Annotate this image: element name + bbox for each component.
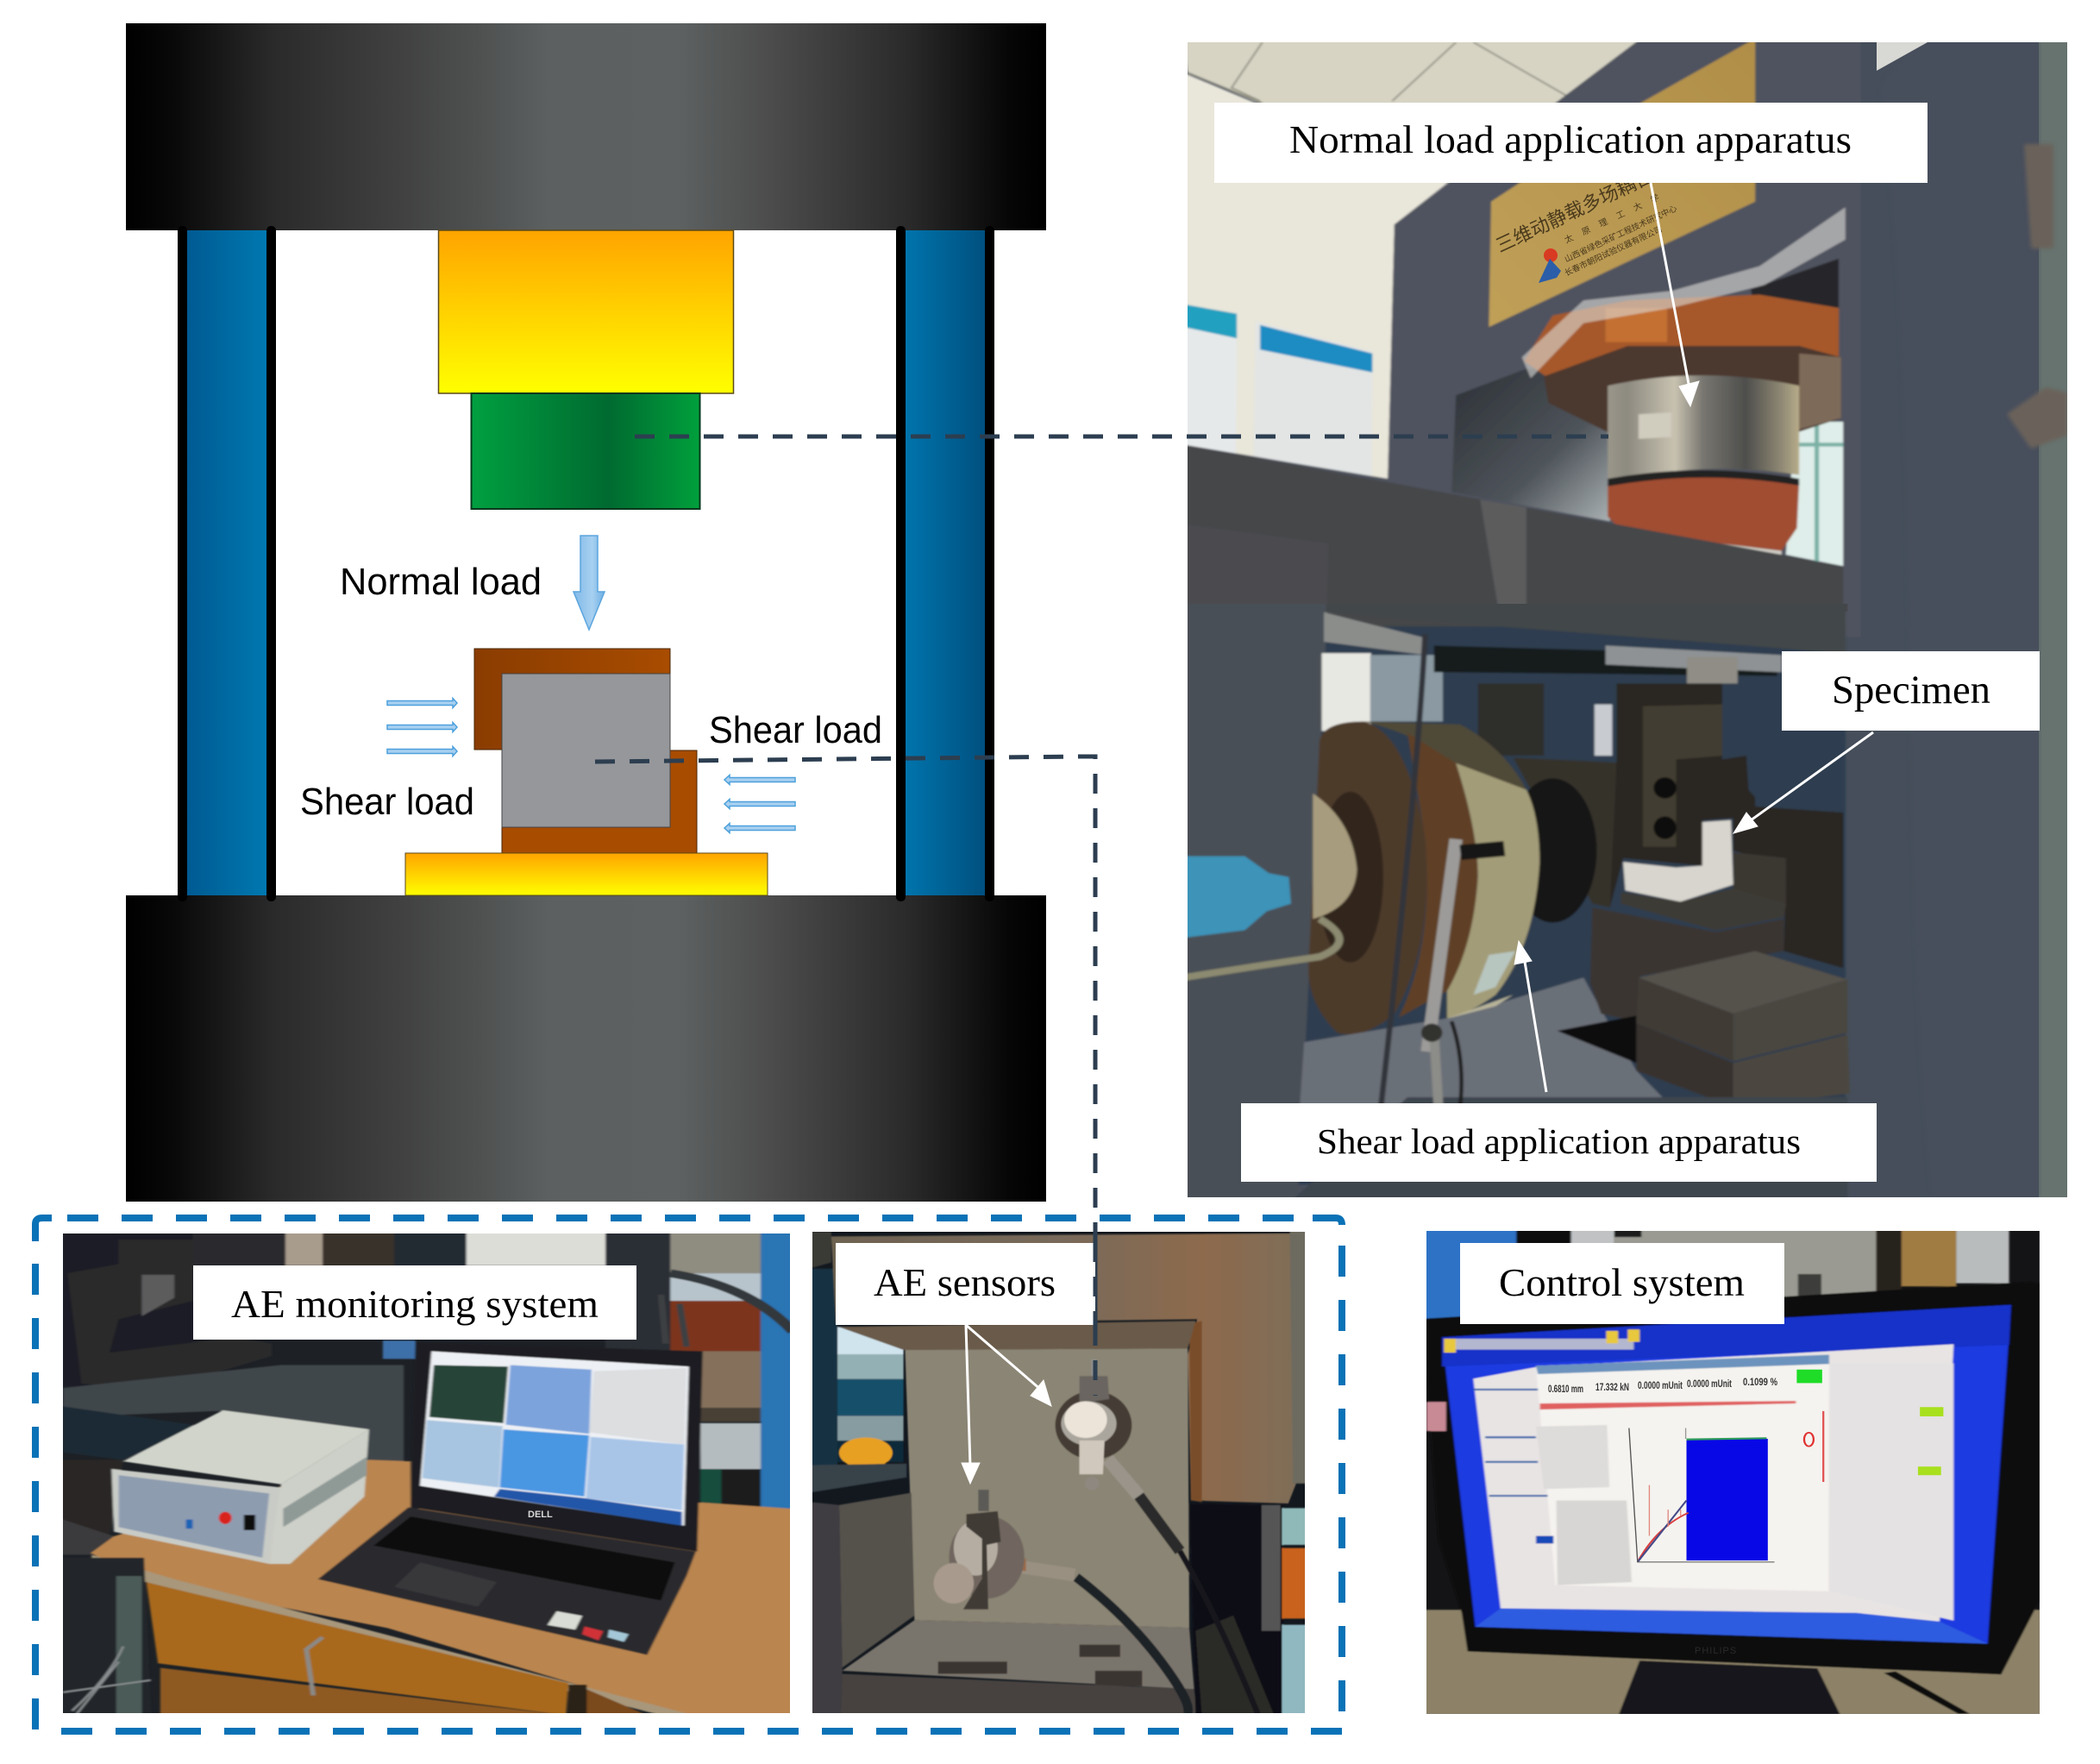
arrow: specimen (1733, 732, 1873, 833)
photo: AE sensors (809, 1228, 1307, 1716)
leader line: normal load apparatus (635, 435, 1608, 438)
plaque inscription: 长春市朝阳试验仪器有限公司 (1563, 224, 1664, 279)
arrow: shear load apparatus (1514, 941, 1546, 1092)
upper machine detail (1183, 39, 1865, 642)
label: AE monitoring system (193, 1265, 636, 1340)
photo: test machine (1179, 39, 2067, 1199)
leader line over AE sensors label (1094, 1242, 1097, 1328)
label: normal load application apparatus (1214, 103, 1928, 183)
plaque inscription: 太原理工大学 (1563, 187, 1671, 246)
label: shear load application apparatus (1241, 1103, 1877, 1182)
dashed box: AE monitoring group (35, 1218, 1342, 1732)
green piston (471, 393, 700, 509)
monitor readout text (1548, 1376, 1777, 1395)
monitor readout text: 0.1099 % (1743, 1376, 1777, 1388)
upper shear box (474, 649, 670, 750)
label: AE sensors: AE sensors (874, 1260, 1056, 1304)
lower shear box (502, 750, 697, 853)
specimen (502, 674, 670, 827)
normal load arrow (574, 536, 605, 630)
monitor readout text: 0.0000 mUnit (1687, 1378, 1732, 1390)
normal load label: Normal load (340, 561, 542, 603)
plaque inscription: 山西省绿色采矿工程技术研究中心 (1563, 203, 1679, 265)
monitor readout text: 0.0000 mUnit (1638, 1379, 1683, 1391)
arrows: AE sensors (962, 1325, 1051, 1484)
plaque logo (1539, 248, 1561, 283)
monitor brand mark: PHILIPS (1695, 1646, 1737, 1656)
plaque inscription: 三维动静载多场耦合 联合研制 (1493, 130, 1730, 257)
label: shear load application apparatus: Shear load application apparatus (1317, 1121, 1801, 1161)
photo: control system monitor (1422, 1227, 2042, 1716)
label: control system (1460, 1243, 1784, 1324)
bottom base (126, 895, 1046, 1202)
right blue column (896, 226, 994, 901)
plaque inscription (1495, 183, 1677, 276)
panel: loading frame schematic (126, 23, 1046, 1202)
left shear load label: Shear load (300, 781, 474, 823)
left blue column (178, 226, 276, 901)
right shear load label: Shear load (709, 709, 882, 751)
leader line: specimen to AE sensors (595, 756, 1095, 1396)
label: control system: Control system (1499, 1260, 1745, 1304)
label: specimen (1782, 651, 2040, 731)
arrow: normal load apparatus (1651, 183, 1699, 406)
lower machine detail (1179, 593, 1850, 1199)
laptop brand mark: DELL (528, 1510, 553, 1520)
yellow load block (438, 230, 733, 393)
yellow base block (405, 853, 768, 895)
monitor readout text: 17.332 kN (1595, 1381, 1629, 1393)
left shear arrows (387, 699, 457, 756)
label: AE sensors (836, 1243, 1095, 1325)
monitor readout text: 0.6810 mm (1548, 1383, 1583, 1395)
top crosshead (126, 23, 1046, 230)
label: AE monitoring system: AE monitoring system (231, 1282, 599, 1326)
label: specimen: Specimen (1832, 668, 1990, 713)
right shear arrows (724, 775, 795, 833)
label: normal load application apparatus: Normal load application apparatus (1289, 117, 1852, 161)
photo: AE monitoring system (59, 1230, 793, 1715)
